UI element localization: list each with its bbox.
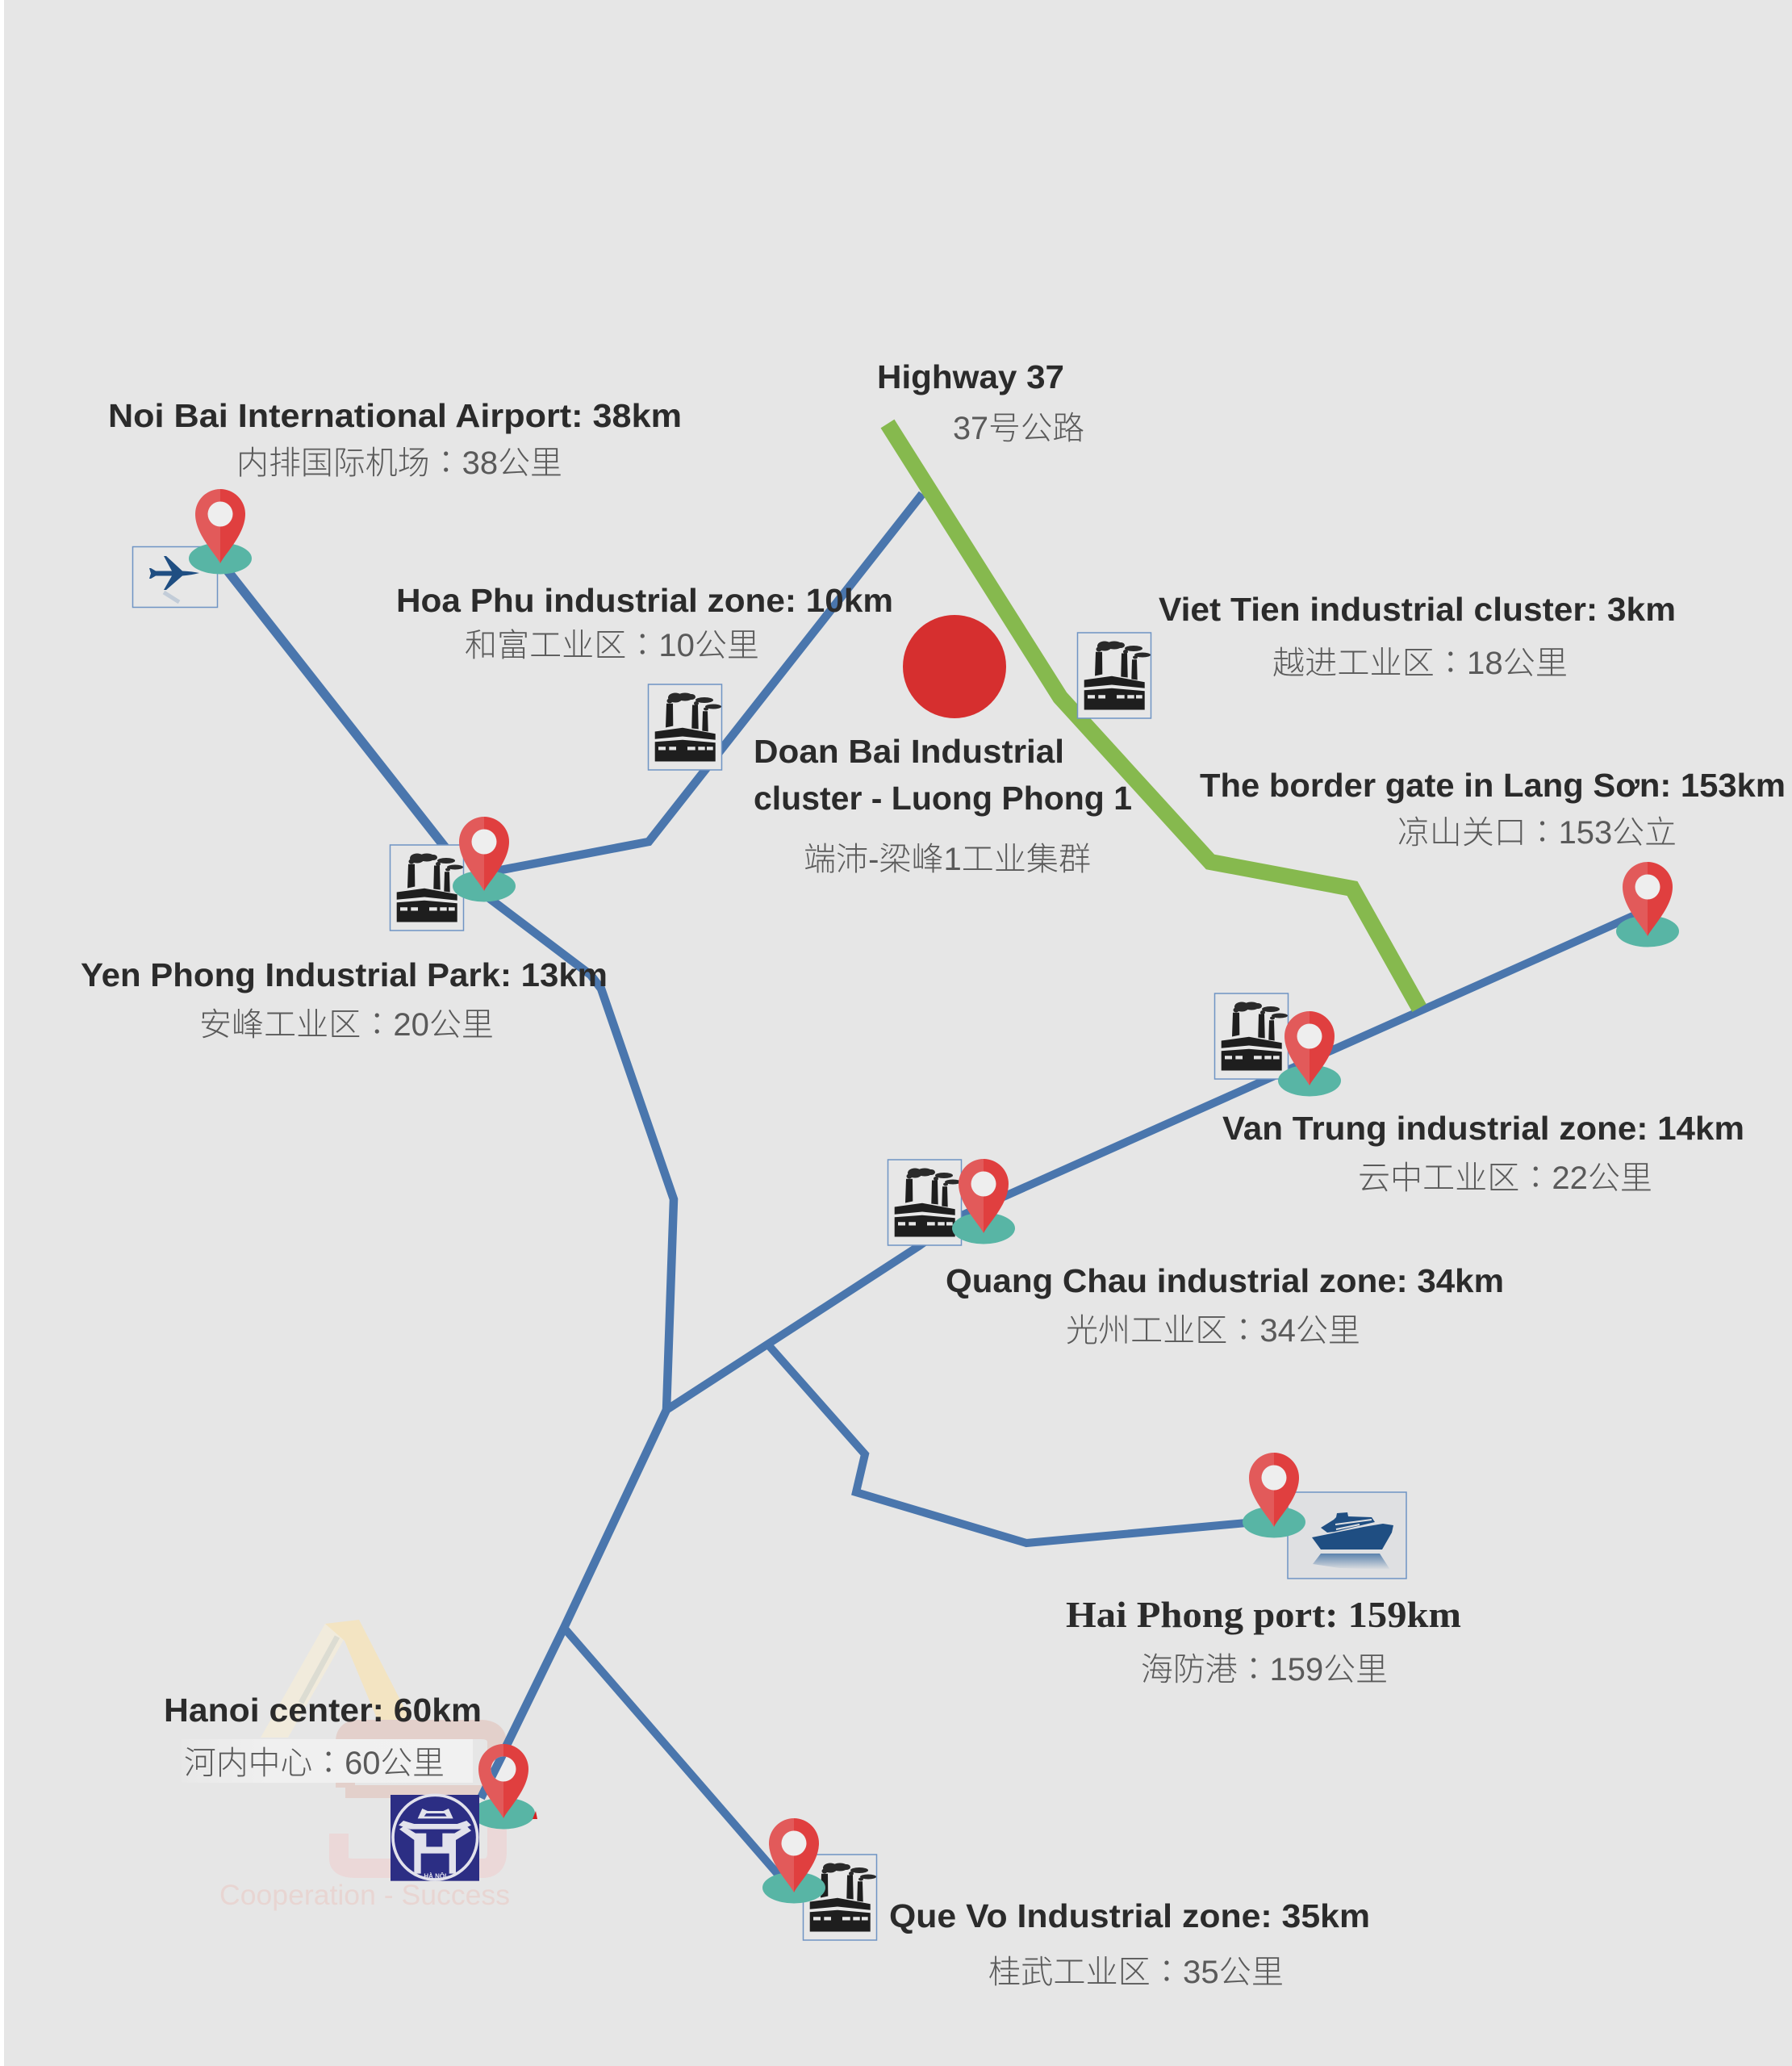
pin: Hanoi bbox=[478, 1744, 535, 1829]
label: Noi Bai airport: 内排国际机场：38公里 bbox=[236, 437, 562, 483]
label: Highway 37 bbox=[877, 358, 1084, 446]
blue road network bbox=[218, 494, 1642, 1884]
green highway 37 bbox=[888, 424, 1419, 1008]
label: Highway 37: Highway 37 bbox=[877, 358, 1064, 395]
label: Van Trung bbox=[1222, 1110, 1744, 1198]
label: Van Trung: Van Trung industrial zone: 14km bbox=[1222, 1110, 1744, 1147]
label: Viet Tien: 越进工业区：18公里 bbox=[1272, 637, 1568, 684]
label: Que Vo: 桂武工业区：35公里 bbox=[988, 1946, 1284, 1993]
icon: factory Quang Chau bbox=[888, 1160, 962, 1245]
label: Hai Phong port: Hai Phong port: 159km bbox=[1066, 1594, 1461, 1635]
icon: factory Van Trung bbox=[1215, 993, 1288, 1079]
label: Hanoi center: Hanoi center: 60km bbox=[164, 1692, 482, 1729]
label: Noi Bai airport bbox=[108, 397, 682, 483]
label: Hoa Phu: 和富工业区：10公里 bbox=[465, 619, 759, 666]
red mark next to Hanoi pin bbox=[533, 1811, 537, 1819]
pin: Quang Chau bbox=[952, 1159, 1015, 1244]
label: Viet Tien: Viet Tien industrial cluster: 3km bbox=[1159, 591, 1676, 628]
pin: Que Vo bbox=[762, 1818, 825, 1903]
label: Lang Son border gate: The border gate in Lang Sơn: 153km bbox=[1200, 767, 1786, 804]
pin: Yen Phong bbox=[453, 817, 516, 902]
label: Hai Phong port: 海防港：159公里 bbox=[1141, 1643, 1388, 1690]
pin: Noi Bai airport bbox=[189, 489, 252, 575]
pin: Hai Phong bbox=[1243, 1453, 1305, 1538]
pin: Van Trung bbox=[1278, 1011, 1341, 1096]
label: Yen Phong: 安峰工业区：20公里 bbox=[199, 998, 494, 1045]
icon: Hanoi logo: HÀ NỘI bbox=[424, 1872, 446, 1880]
watermark logo: Cooperation - Success bbox=[219, 1880, 510, 1911]
label: Noi Bai airport: Noi Bai International Airport: 38km bbox=[108, 397, 682, 434]
icon: Hanoi logo bbox=[391, 1795, 479, 1881]
label: Yen Phong: Yen Phong Industrial Park: 13km bbox=[81, 956, 608, 993]
label: Que Vo: Que Vo Industrial zone: 35km bbox=[889, 1897, 1370, 1934]
label: Viet Tien bbox=[1159, 591, 1676, 684]
label: Hoa Phu: Hoa Phu industrial zone: 10km bbox=[396, 582, 893, 619]
label: Doan Bai cluster: 端沛-梁峰1工业集群 bbox=[804, 842, 1091, 877]
label: Doan Bai cluster bbox=[754, 733, 1132, 877]
red dot: Doan Bai cluster location bbox=[903, 615, 1006, 718]
label: Hoa Phu bbox=[396, 582, 893, 666]
icon: ship box bbox=[1288, 1492, 1406, 1579]
label: Lang Son border gate: 凉山关口：153公立 bbox=[1397, 806, 1677, 853]
label: Highway 37: 37号公路 bbox=[953, 411, 1084, 446]
label: Que Vo bbox=[889, 1897, 1370, 1993]
icon: factory Viet Tien bbox=[1078, 633, 1151, 718]
pin: Lang Son border gate bbox=[1616, 862, 1679, 947]
label: Quang Chau: 光州工业区：34公里 bbox=[1066, 1304, 1360, 1351]
label: Lang Son border gate bbox=[1200, 767, 1786, 853]
Hanoi label background bbox=[182, 1739, 473, 1783]
label: Doan Bai cluster: Doan Bai Industrial bbox=[754, 733, 1064, 770]
label: Quang Chau: Quang Chau industrial zone: 34km bbox=[946, 1262, 1504, 1299]
label: Quang Chau bbox=[946, 1262, 1504, 1351]
label: Yen Phong bbox=[81, 956, 608, 1045]
label: Van Trung: 云中工业区：22公里 bbox=[1358, 1152, 1652, 1198]
icon: factory Que Vo bbox=[804, 1855, 876, 1940]
watermark logo bbox=[219, 1620, 510, 1911]
icon: airplane box bbox=[132, 547, 218, 607]
label: Hai Phong port bbox=[1066, 1594, 1461, 1690]
icon: factory Yen Phong bbox=[391, 845, 463, 931]
label: Doan Bai cluster: cluster - Luong Phong 1 bbox=[754, 780, 1132, 817]
label: Hanoi center: 河内中心：60公里 bbox=[184, 1737, 445, 1784]
label: Hanoi center bbox=[164, 1692, 482, 1784]
icon: factory Hoa Phu bbox=[649, 684, 721, 770]
